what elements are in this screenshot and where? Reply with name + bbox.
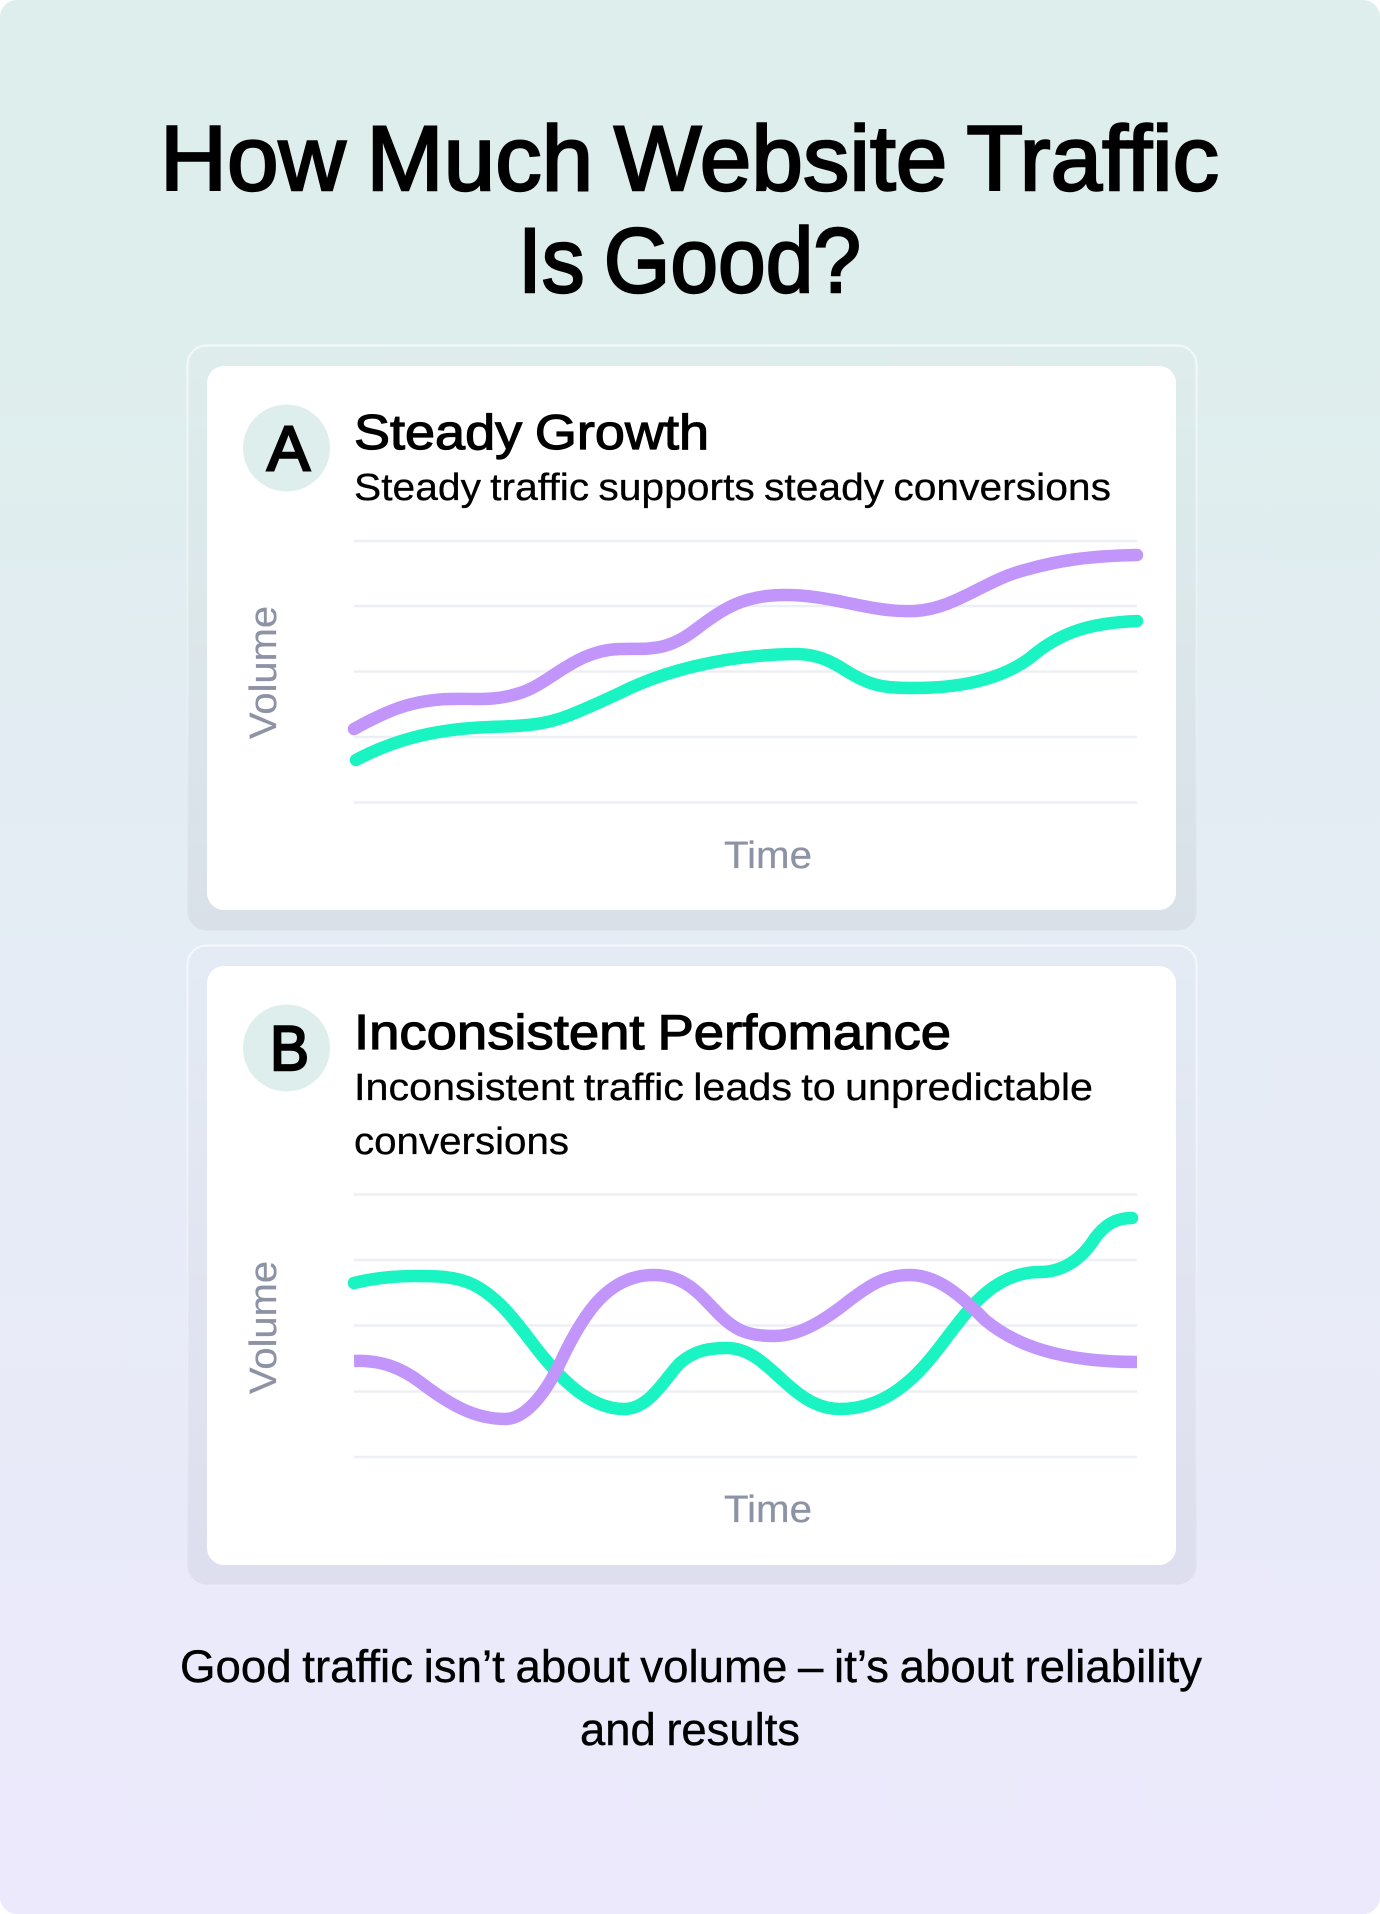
green series A [356, 621, 1137, 760]
card A [207, 366, 1176, 910]
title [160, 108, 1219, 312]
heading B: Inconsistent Perfomance [354, 1006, 951, 1060]
y axis label B: Volume [243, 1261, 285, 1394]
x axis label B: Time [724, 1489, 812, 1531]
card B [207, 966, 1176, 1565]
badge B: B [270, 1014, 309, 1084]
purple series B [354, 1275, 1137, 1419]
panel: B inconsistent performance [188, 946, 1196, 1584]
footer text: and results [580, 1704, 800, 1755]
footer text [180, 1641, 1202, 1755]
subtitle B [354, 1067, 1093, 1163]
subtitle B: Inconsistent traffic leads to unpredictable [354, 1067, 1093, 1109]
panel: A steady growth [188, 346, 1196, 930]
badge A [243, 404, 330, 492]
subtitle A: Steady traffic supports steady conversions [354, 467, 1111, 509]
x axis label A: Time [724, 835, 812, 877]
badge A: A [267, 414, 310, 484]
green series B [354, 1218, 1132, 1409]
y axis label A: Volume [243, 606, 285, 739]
subtitle B: conversions [354, 1121, 569, 1163]
purple series A [354, 555, 1137, 729]
badge B [243, 1004, 330, 1092]
footer text: Good traffic isn’t about volume – it’s about reliability [180, 1641, 1202, 1692]
line chart B [243, 1194, 1137, 1531]
line chart A [243, 541, 1137, 877]
title: How Much Website Traffic [160, 108, 1219, 210]
heading A: Steady Growth [354, 406, 709, 460]
title: Is Good? [518, 210, 861, 312]
